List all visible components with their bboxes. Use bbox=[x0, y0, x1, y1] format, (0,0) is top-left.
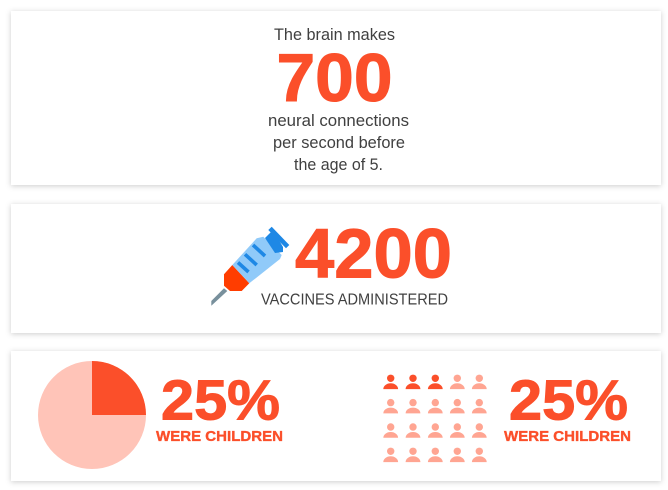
text: vaccines administered: VACCINES ADMINISTERED bbox=[261, 292, 448, 308]
icon: syringe bbox=[211, 227, 289, 306]
stat: 25% were children, right: 25% bbox=[509, 368, 628, 432]
number: 700: 700 bbox=[276, 40, 392, 116]
stat: 25% were children, left: 25% bbox=[161, 368, 280, 432]
text: neural connections description: neural connections bbox=[268, 111, 409, 130]
panel: children statistics bbox=[11, 351, 661, 481]
text: the brain makes: The brain makes bbox=[274, 25, 395, 44]
stat: 25% were children, left: WERE CHILDREN bbox=[156, 429, 283, 445]
number: 4200: 4200 bbox=[295, 214, 452, 292]
icon grid: people bbox=[383, 375, 487, 462]
text: neural connections description bbox=[268, 111, 409, 174]
panel: brain fact bbox=[11, 11, 661, 185]
text: neural connections description: the age of 5. bbox=[294, 155, 383, 174]
text: neural connections description: per second before bbox=[273, 133, 405, 152]
panel: vaccines bbox=[11, 204, 661, 333]
pie chart: 25 percent bbox=[38, 361, 146, 469]
stat: 25% were children, right: WERE CHILDREN bbox=[504, 429, 631, 445]
